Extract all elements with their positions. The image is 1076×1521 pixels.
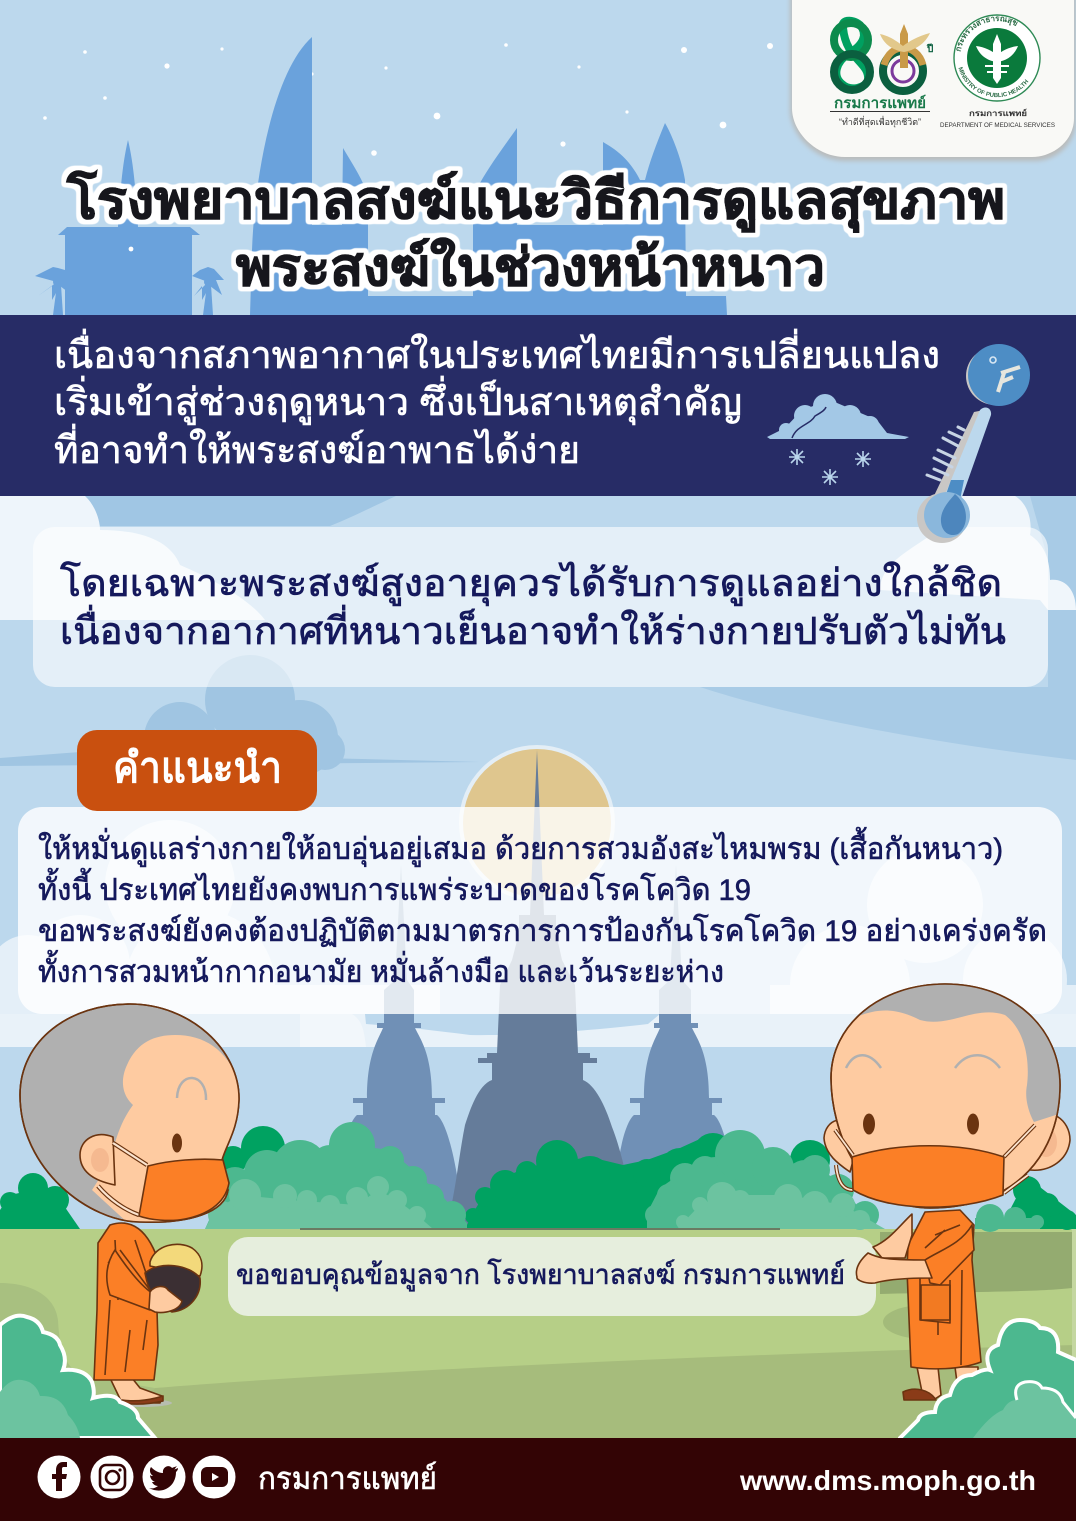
footer department name: กรมการแพทย์ (258, 1461, 437, 1496)
advice text: ทั้งการสวมหน้ากากอนามัย หมั่นล้างมือ และเว้นระยะห่าง (38, 950, 724, 989)
background: blue temple silhouette (35, 37, 727, 315)
intro text: เริ่มเข้าสู่ช่วงฤดูหนาว ซึ่งเป็นสาเหตุสำคัญ (54, 376, 742, 425)
logo: ministry seal (940, 14, 1056, 129)
icon: facebook (38, 1456, 80, 1498)
arm and hand (107, 1250, 182, 1313)
eye (172, 1134, 182, 1152)
heading: advice label (77, 730, 317, 811)
footer website: www.dms.moph.go.th (739, 1465, 1036, 1496)
character: right monk greeting (824, 980, 1070, 1400)
panel: highlight box (33, 527, 1048, 687)
panel: thank-you credit (228, 1237, 876, 1316)
arms and hands (856, 1214, 932, 1283)
logo: ministry seal: MINISTRY OF PUBLIC HEALTH (958, 66, 1028, 98)
background: sky shading and clouds (0, 496, 1076, 1060)
center stupa (445, 750, 640, 1230)
dark bushes (0, 1126, 1076, 1230)
highlight text (60, 561, 1006, 653)
mid bushes (205, 1122, 1044, 1232)
foreground bush right (900, 1320, 1076, 1440)
panel: advice card (18, 807, 1062, 1014)
highlight text: โดยเฉพาะพระสงฆ์สูงอายุควรได้รับการดูแลอย่างใกล้ชิด (60, 561, 1002, 606)
mask straps (835, 1125, 1035, 1193)
logo: 80th anniversary (830, 21, 933, 128)
alms bowl (145, 1244, 202, 1312)
title: พระสงฆ์ในช่วงหน้าหนาว (236, 237, 825, 297)
logo: ministry seal: DEPARTMENT OF MEDICAL SERVICES (940, 122, 1056, 129)
head (20, 1004, 240, 1225)
logo: 80th anniversary: ปี (926, 43, 933, 55)
robe (907, 1210, 981, 1369)
logo panel (788, 0, 1076, 163)
intro text: ที่อาจทำให้พระสงฆ์อาพาธได้ง่าย (54, 424, 580, 472)
advice text (38, 827, 1047, 989)
logo: ministry seal: กระทรวงสาธารณสุข (956, 16, 1018, 52)
ear (80, 1135, 115, 1185)
mask strap (98, 1143, 147, 1215)
panel: intro band (0, 315, 1076, 496)
mask (139, 1159, 229, 1220)
logo: 80th anniversary: กรมการแพทย์ (834, 94, 926, 112)
stupas (339, 750, 735, 1230)
light bushes (205, 1176, 885, 1230)
logo: ministry seal: กรมการแพทย์ (969, 108, 1027, 118)
advice text: ขอพระสงฆ์ยังคงต้องปฏิบัติตามมาตรการการป้องกันโรคโควิด 19 อย่างเคร่งครัด (38, 913, 1047, 948)
eyes (863, 1114, 979, 1134)
footer bar (0, 1438, 1076, 1521)
foreground bush left (0, 1316, 155, 1438)
intro text: เนื่องจากสภาพอากาศในประเทศไทยมีการเปลี่ยนแปลง (54, 329, 940, 377)
title (66, 169, 1005, 297)
head (824, 980, 1070, 1208)
mask (852, 1146, 1004, 1207)
feet (903, 1367, 978, 1400)
bushes row (0, 1122, 1076, 1232)
sun (459, 745, 615, 901)
panel: thank-you credit: ขอขอบคุณข้อมูลจาก โรงพยาบาลสงฆ์ กรมการแพทย์ (236, 1258, 845, 1292)
eyebrow (177, 1078, 206, 1100)
advice text: ทั้งนี้ ประเทศไทยยังคงพบการแพร่ระบาดของโรคโควิด 19 (38, 868, 751, 907)
robe (94, 1223, 158, 1380)
feet (108, 1378, 172, 1407)
icon: instagram (90, 1456, 134, 1498)
icon: youtube (192, 1456, 236, 1498)
character: left monk with alms bowl (20, 1004, 240, 1407)
highlight text: เนื่องจากอากาศที่หนาวเย็นอาจทำให้ร่างกายปรับตัวไม่ทัน (60, 605, 1006, 653)
logo: 80th anniversary: “ทำดีที่สุดเพื่อทุกชีวิต” (839, 115, 921, 128)
ground (0, 1229, 1076, 1438)
left stupa (339, 865, 462, 1230)
right stupa (616, 865, 735, 1230)
background: snow dots (43, 43, 773, 156)
advice text: ให้หมั่นดูแลร่างกายให้อบอุ่นอยู่เสมอ ด้วยการสวมอังสะไหมพรม (เสื้อกันหนาว) (38, 827, 1003, 868)
icon: rain cloud with snowflakes (767, 394, 909, 485)
icon: twitter (142, 1456, 186, 1498)
title: โรงพยาบาลสงฆ์แนะวิธีการดูแลสุขภาพ (66, 169, 1005, 233)
heading: advice label: คำแนะนำ (113, 744, 282, 791)
light leaves left (0, 1380, 80, 1438)
light leaves right (973, 1382, 1076, 1438)
eyebrows (846, 1055, 1000, 1068)
icon: thermometer (917, 344, 1030, 543)
intro text (54, 329, 940, 472)
